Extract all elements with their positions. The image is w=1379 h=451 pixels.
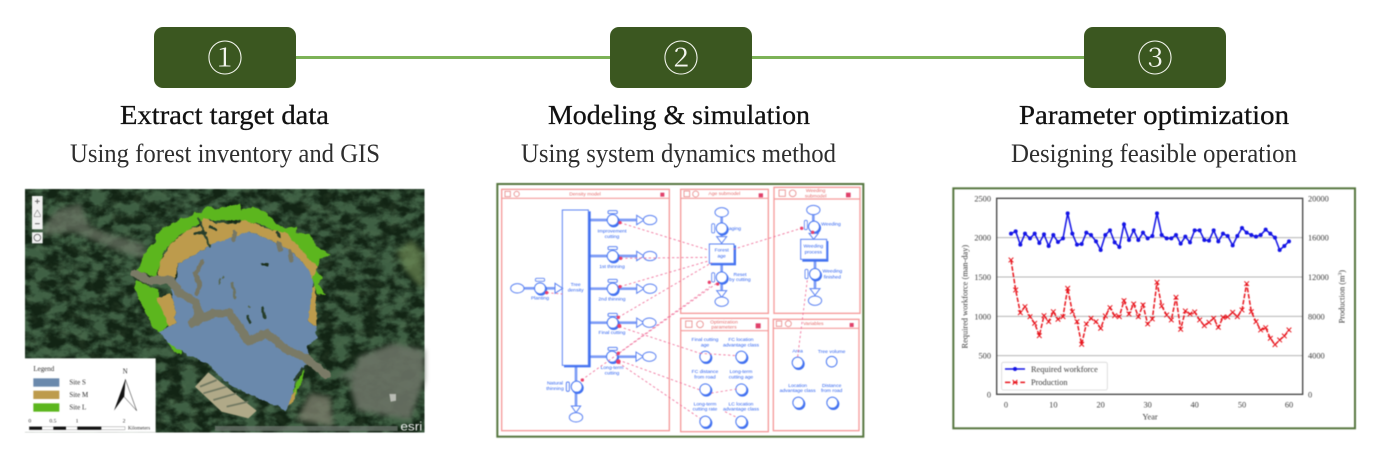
right axis labels: 0: [1308, 390, 1312, 399]
step 2 badge: ②: [663, 31, 699, 82]
map legend: 0.5: [49, 418, 57, 424]
connector line between steps: [295, 56, 1085, 59]
left axis labels: 1000: [974, 312, 991, 321]
variables: from road: [821, 388, 843, 394]
density model submodel: density: [568, 288, 584, 294]
right axis title: ): [1338, 270, 1347, 273]
left axis labels: 1500: [974, 273, 991, 282]
right axis title: 3: [1337, 273, 1343, 276]
optimization parameters: Optimization: [710, 319, 738, 325]
right axis labels: [1308, 194, 1329, 399]
density model submodel: Planting: [531, 296, 549, 302]
weeding submodel: Weeding: [821, 222, 841, 228]
map legend: N: [123, 367, 128, 375]
optimization parameters: cutting rate: [693, 407, 718, 413]
chart legend: Production: [1031, 378, 1068, 387]
age submodel: [681, 189, 768, 313]
map legend: [25, 358, 156, 432]
gridlines: [997, 238, 1303, 356]
age submodel: by cutting: [729, 277, 751, 283]
variables: Tree volume: [818, 349, 846, 355]
optimization parameters: FC distance: [692, 369, 719, 375]
axes: [997, 198, 1303, 394]
panel: satellite map: [25, 189, 424, 434]
variables: Location: [788, 383, 807, 389]
subheading: feasible operation: Designing feasible operation: [1011, 139, 1297, 168]
map legend: 0: [28, 418, 31, 424]
left axis labels: 0: [987, 390, 991, 399]
age submodel: Forest: [715, 248, 729, 254]
left axis title: Required workforce (man-day): [960, 245, 969, 348]
weeding submodel: Weeding: [823, 269, 842, 275]
subheading: forest inventory: Using forest inventory and GIS: [70, 139, 380, 168]
density model submodel: cutting: [605, 370, 620, 376]
optimization parameters: Long-term: [694, 401, 716, 407]
step 3 badge: ③: [1137, 31, 1173, 82]
density model submodel: Density model: [569, 191, 601, 197]
map attribution: esri: [400, 420, 422, 434]
density model submodel: cutting: [605, 234, 620, 240]
density model submodel: [502, 189, 669, 431]
optimization parameters: age: [701, 342, 709, 348]
weeding submodel: [774, 187, 860, 313]
chart frame: [953, 188, 1355, 428]
weeding submodel: process: [805, 249, 823, 255]
chart legend: Required workforce: [1031, 365, 1098, 374]
map zoom controls: [32, 196, 43, 243]
series: production: [1011, 260, 1289, 345]
subheading: system dynamics: Using system dynamics method: [521, 139, 836, 168]
density model submodel: 2nd thinning: [598, 297, 626, 303]
project site zones: [134, 204, 330, 410]
density model submodel: Final cutting: [599, 330, 626, 336]
variables: Area: [792, 349, 803, 355]
map legend: Site L: [69, 403, 86, 411]
step 3 badge: [1084, 27, 1226, 88]
optimization parameters: Long-term: [730, 369, 752, 375]
step 1 badge: ①: [207, 31, 243, 82]
panel: system dynamics diagram: [497, 184, 863, 437]
step 2 badge: [610, 27, 752, 88]
density model submodel: Natural: [547, 380, 563, 386]
optimization parameters: Final cutting: [692, 337, 719, 343]
age submodel: Reset: [733, 272, 747, 278]
link endpoints: [545, 221, 814, 382]
x axis labels: 60: [1285, 400, 1293, 409]
left axis labels: 500: [978, 352, 991, 361]
density model submodel: thinning: [546, 386, 564, 392]
map legend: 2: [123, 418, 126, 424]
weeding submodel: submodel: [805, 193, 826, 199]
map legend: Site S: [69, 379, 86, 387]
density model submodel: Improvement: [597, 228, 627, 234]
age submodel: aging: [729, 226, 741, 232]
x axis labels: 10: [1049, 400, 1057, 409]
left axis labels: 2500: [974, 194, 991, 203]
panel: line chart: [953, 188, 1355, 428]
dashed dependency links: [547, 223, 807, 418]
density model submodel: Tree: [571, 282, 581, 288]
optimization parameters: cutting age: [729, 374, 753, 380]
site S area: [159, 232, 317, 410]
site L area: [134, 204, 330, 397]
x axis labels: 40: [1191, 400, 1199, 409]
map legend: 1: [76, 418, 79, 424]
heading: extract target data: Extract target data: [120, 100, 329, 130]
left axis labels: 2000: [974, 234, 991, 243]
variables: Distance: [822, 383, 842, 389]
left axis labels: [974, 194, 991, 399]
variables: [773, 319, 859, 431]
x axis labels: [1004, 400, 1293, 421]
map attribution: [215, 420, 422, 434]
density model submodel: Long-term: [601, 365, 623, 371]
age submodel: Age submodel: [708, 191, 740, 197]
river and forest gaps: [135, 218, 327, 380]
right axis title: Production (m: [1338, 276, 1347, 323]
variables: Variables: [803, 321, 824, 327]
x axis labels: Year: [1142, 412, 1158, 421]
optimization parameters: from road: [694, 374, 716, 380]
weeding submodel: finished: [824, 274, 841, 280]
right axis labels: 8000: [1308, 312, 1325, 321]
weeding submodel: Weeding: [804, 244, 823, 250]
diagram frame: [497, 184, 863, 437]
step 1 badge: [154, 27, 296, 88]
weeding submodel: Weeding: [806, 188, 826, 194]
optimization parameters: FC location: [728, 337, 754, 343]
map legend: Site M: [69, 391, 88, 399]
map background: [25, 189, 424, 432]
optimization parameters: advantage class: [723, 342, 760, 348]
site M area: [157, 218, 318, 408]
map legend: Kilometers: [128, 427, 150, 432]
heading: parameter optimization: Parameter optimization: [1019, 100, 1290, 130]
variables: advantage class: [780, 388, 816, 394]
right axis labels: 12000: [1308, 273, 1329, 282]
series: required workforce: [1011, 213, 1289, 250]
optimization parameters: parameters: [711, 325, 737, 331]
right axis labels: 4000: [1308, 352, 1325, 361]
x axis labels: 30: [1144, 400, 1152, 409]
heading: modeling and simulation: Modeling & simulation: [548, 100, 811, 130]
x axis labels: 50: [1238, 400, 1246, 409]
density model submodel: 1st thinning: [599, 264, 625, 270]
chart legend: [1002, 362, 1107, 390]
right axis labels: 20000: [1308, 194, 1329, 203]
right axis labels: 16000: [1308, 234, 1329, 243]
optimization parameters: [681, 318, 768, 432]
optimization parameters: advantage class: [723, 407, 760, 413]
age submodel: age: [718, 253, 726, 259]
map legend: Legend: [33, 365, 55, 373]
x axis labels: 20: [1097, 400, 1105, 409]
optimization parameters: LC location: [729, 401, 754, 407]
x axis labels: 0: [1004, 400, 1008, 409]
